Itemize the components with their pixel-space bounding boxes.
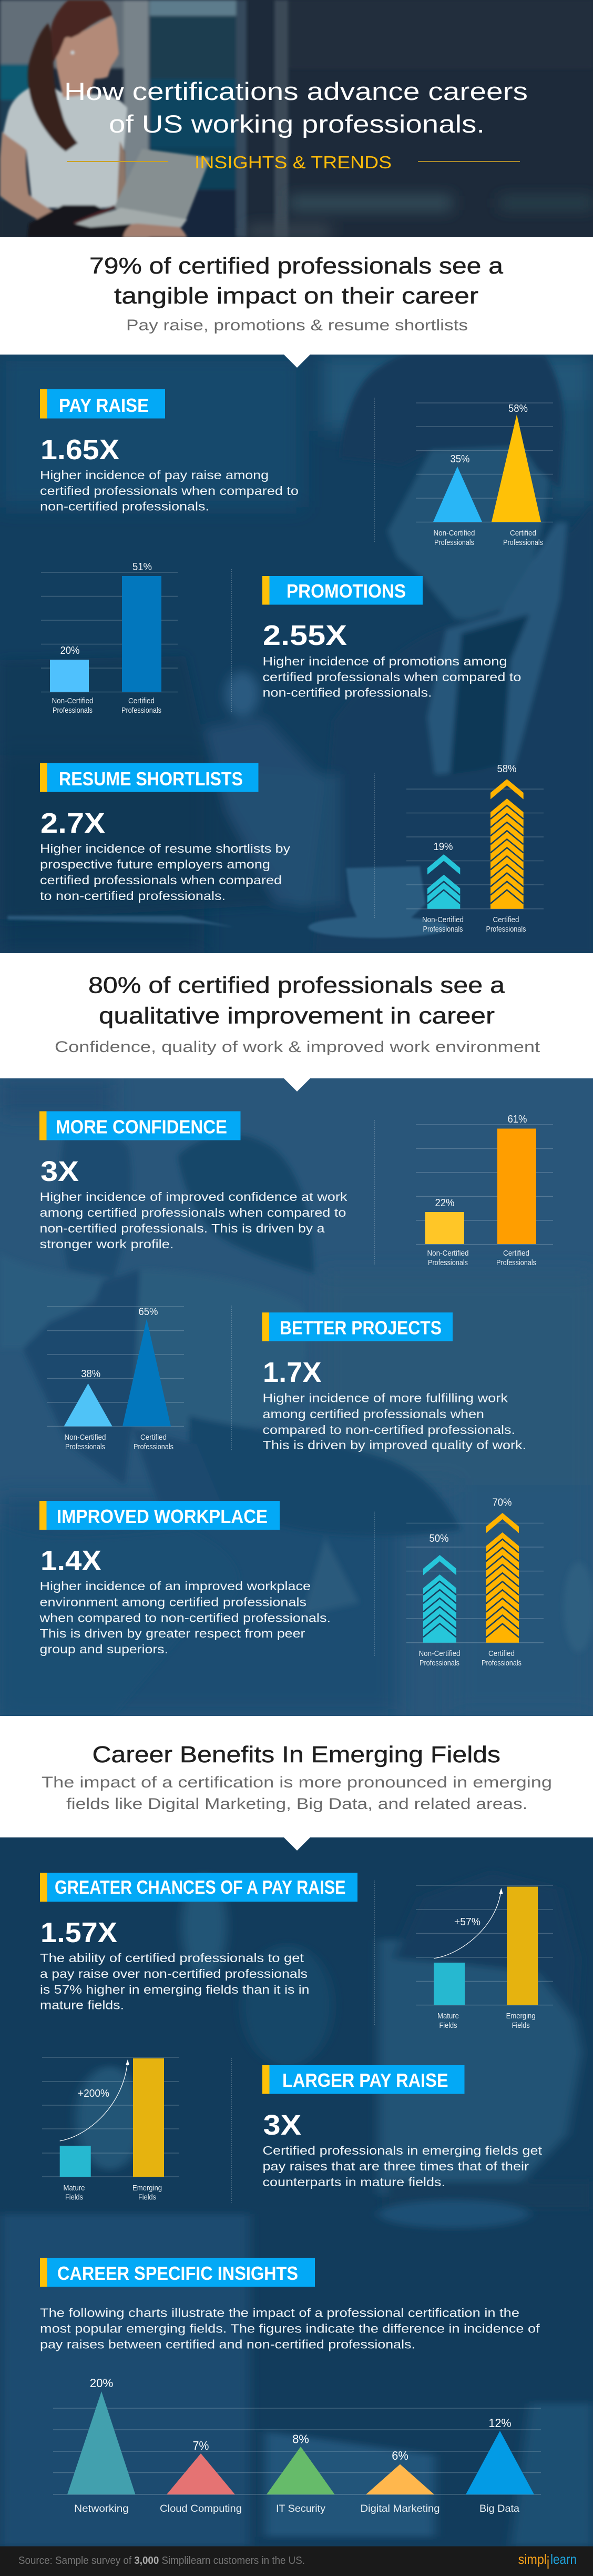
- it security: IT Security: [276, 2503, 326, 2514]
- triangle chart: 58%: [508, 403, 528, 415]
- subheading: Confidence, quality of work & improved work environment: [55, 1038, 540, 1056]
- triangle chart: [416, 403, 553, 547]
- description: to non-certified professionals.: [40, 889, 226, 903]
- description: among certified professionals when: [263, 1407, 484, 1421]
- figure: 3X: [40, 1156, 79, 1187]
- it security: 8%: [292, 2432, 309, 2446]
- description: non-certified professionals.: [263, 686, 432, 700]
- chevron chart: 19%: [433, 841, 453, 853]
- digital marketing: [361, 2449, 439, 2514]
- hero panel: [0, 0, 593, 237]
- hero photo: woman with laptop: [0, 0, 593, 237]
- chevron chart: [406, 763, 544, 934]
- description: is 57% higher in emerging fields than it is in: [40, 1983, 309, 1996]
- panel: 80% qualitative improvement header: [0, 953, 593, 1078]
- bar chart: Professionals: [53, 706, 93, 715]
- triangle chart: Certified: [510, 529, 536, 538]
- description: [39, 1579, 331, 1656]
- bar chart: [41, 561, 178, 715]
- photo background: section three, smiling man and laptop: [0, 1837, 593, 2547]
- triangle chart: 35%: [450, 453, 470, 465]
- tag: PROMOTIONS: [287, 580, 406, 602]
- tag: GREATER CHANCES OF A PAY RAISE: [55, 1876, 346, 1898]
- description: compared to non-certified professionals.: [263, 1423, 515, 1437]
- figure: 3X: [263, 2109, 301, 2141]
- triangle chart: Non-Certified: [433, 529, 475, 538]
- description: certified professionals when compared: [40, 873, 282, 887]
- subheading: fields like Digital Marketing, Big Data, and related areas.: [66, 1795, 528, 1813]
- description: [263, 654, 522, 700]
- description: This is driven by improved quality of work.: [263, 1438, 526, 1452]
- triangle chart: [47, 1306, 184, 1451]
- chevron chart: 50%: [429, 1533, 449, 1544]
- panel: 79% tangible impact header: [0, 237, 593, 355]
- description: Higher incidence of more fulfilling work: [263, 1391, 508, 1405]
- hero title: How certifications advance careers: [64, 77, 528, 105]
- tag: [40, 763, 259, 792]
- subheading: The impact of a certification is more pronounced in emerging: [42, 1774, 552, 1791]
- heading: 80% of certified professionals see a: [88, 972, 505, 998]
- triangle chart: Non-Certified: [64, 1433, 106, 1442]
- description: environment among certified professionals: [40, 1595, 306, 1609]
- notch arrow: [284, 1837, 310, 1851]
- tag: [39, 1111, 241, 1140]
- bar chart: Professionals: [496, 1259, 536, 1267]
- block: promotions: [41, 561, 522, 715]
- tag: PAY RAISE: [59, 395, 149, 416]
- description: [40, 2306, 540, 2351]
- tag: CAREER SPECIFIC INSIGHTS: [57, 2262, 298, 2284]
- description: Higher incidence of resume shortlists by: [40, 842, 291, 855]
- bar chart with growth arrow: [42, 2057, 179, 2202]
- bar chart with growth arrow: Emerging: [132, 2184, 162, 2193]
- description: pay raises between certified and non-certified professionals.: [40, 2338, 415, 2351]
- tag: IMPROVED WORKPLACE: [57, 1506, 268, 1527]
- chevron chart: Professionals: [423, 925, 463, 934]
- figure: 2.55X: [263, 620, 347, 651]
- description: group and superiors.: [40, 1642, 168, 1656]
- triangle chart: Certified: [140, 1433, 167, 1442]
- description: stronger work profile.: [40, 1237, 173, 1251]
- footer: [0, 2546, 593, 2576]
- chevron chart: Certified: [488, 1650, 515, 1658]
- cloud computing: [160, 2439, 242, 2514]
- networking: 20%: [90, 2376, 113, 2390]
- logo: simplilearn: i: [547, 2553, 549, 2572]
- chevron chart: Non-Certified: [418, 1650, 461, 1658]
- heading: 79% of certified professionals see a: [89, 253, 504, 279]
- chevron chart: 58%: [497, 763, 517, 775]
- figure: 1.4X: [40, 1545, 101, 1577]
- hero subtitle: insights and trends: INSIGHTS & TRENDS: [195, 153, 392, 172]
- heading: qualitative improvement in career: [99, 1003, 495, 1029]
- chevron chart: Professionals: [486, 925, 526, 934]
- logo: simplilearn: simpl: [518, 2551, 547, 2567]
- block: career specific insights: [40, 2258, 541, 2514]
- tag: MORE CONFIDENCE: [56, 1116, 227, 1137]
- triangle chart: 65%: [139, 1306, 158, 1318]
- heading: [89, 253, 504, 309]
- arrow: [60, 2059, 129, 2141]
- cloud computing: 7%: [192, 2439, 209, 2452]
- logo: simplilearn: [518, 2551, 577, 2572]
- tag: RESUME SHORTLISTS: [59, 768, 243, 790]
- block: resume shortlists: [40, 763, 544, 934]
- description: The ability of certified professionals to get: [40, 1951, 304, 1965]
- description: Higher incidence of pay raise among: [40, 468, 269, 482]
- it security: [267, 2432, 335, 2514]
- triangle chart: 38%: [81, 1368, 100, 1380]
- photo background: section one, man at laptop: [0, 350, 593, 953]
- certified chevron bar: [486, 1513, 519, 1643]
- chevron chart: Professionals: [420, 1659, 459, 1668]
- description: certified professionals when compared to: [40, 484, 299, 498]
- triangle chart by field: [53, 2376, 541, 2514]
- description: [263, 1391, 526, 1452]
- notch arrow: [284, 1078, 310, 1092]
- block: pay raise: [40, 389, 553, 547]
- description: certified professionals when compared to: [263, 670, 522, 684]
- description: [40, 1190, 347, 1251]
- bar chart with growth arrow: Fields: [512, 2022, 530, 2030]
- digital marketing: 6%: [392, 2449, 408, 2462]
- bar chart with growth arrow: Fields: [439, 2022, 457, 2030]
- notch arrow: [284, 355, 310, 368]
- figure: 2.7X: [40, 807, 105, 839]
- triangle chart: Professionals: [503, 539, 543, 547]
- description: mature fields.: [40, 1998, 124, 2012]
- bar chart with growth arrow: Emerging: [506, 2012, 536, 2021]
- triangle chart: Professionals: [134, 1443, 173, 1451]
- description: Certified professionals in emerging fields get: [263, 2144, 543, 2157]
- bar chart: 51%: [132, 561, 152, 573]
- source note: Source: Sample survey of 3,000 Simplilearn customers in the US.: [18, 2555, 305, 2567]
- networking: [67, 2376, 136, 2514]
- bar chart: [416, 1114, 553, 1267]
- non-certified chevron bar: [423, 1555, 456, 1643]
- photo background: section two, colleagues: [0, 1078, 593, 1716]
- cloud computing: Cloud Computing: [160, 2503, 242, 2514]
- logo: simplilearn: learn: [550, 2551, 577, 2567]
- tag: BETTER PROJECTS: [280, 1317, 442, 1339]
- bar chart: Professionals: [121, 706, 161, 715]
- chevron chart: Professionals: [482, 1659, 522, 1668]
- description: a pay raise over non-certified professionals: [40, 1967, 308, 1981]
- arrow: [434, 1888, 503, 1958]
- chevron chart: [406, 1497, 544, 1668]
- figure: 1.7X: [263, 1357, 322, 1388]
- hero title: [64, 77, 528, 138]
- tag: [262, 576, 423, 605]
- description: [40, 468, 299, 513]
- description: pay raises that are three times that of their: [263, 2159, 529, 2173]
- bar chart with growth arrow: Fields: [138, 2194, 156, 2202]
- description: The following charts illustrate the impact of a professional certification in the: [40, 2306, 519, 2320]
- chevron chart: Non-Certified: [422, 916, 464, 924]
- description: non-certified professionals. This is driven by a: [40, 1221, 325, 1235]
- chevron chart: 70%: [492, 1497, 512, 1509]
- bar chart with growth arrow: +57%: [454, 1916, 480, 1928]
- description: non-certified professionals.: [40, 500, 209, 513]
- tag: [39, 1501, 280, 1530]
- block: greater chances of a pay raise: [40, 1873, 553, 2030]
- big data: 12%: [489, 2416, 511, 2430]
- panel: career benefits in emerging fields header: [0, 1716, 593, 1837]
- subheading: Pay raise, promotions & resume shortlists: [126, 317, 468, 334]
- bar chart: 22%: [435, 1197, 455, 1209]
- tag: [40, 389, 165, 419]
- heading: tangible impact on their career: [114, 283, 478, 309]
- figure: 1.57X: [40, 1917, 117, 1948]
- bar chart: Certified: [128, 697, 155, 705]
- hero title: of US working professionals.: [109, 110, 485, 138]
- heading: [88, 972, 505, 1029]
- bar chart: 61%: [508, 1114, 527, 1125]
- description: Higher incidence of improved confidence at work: [40, 1190, 347, 1204]
- description: most popular emerging fields. The figures indicate the difference in incidence of: [40, 2322, 540, 2336]
- tag: [262, 1312, 453, 1341]
- tag: [40, 2258, 315, 2287]
- networking: Networking: [74, 2503, 129, 2514]
- subheading: [42, 1774, 552, 1813]
- tag: [40, 1873, 357, 1902]
- non-certified chevron bar: [427, 854, 460, 909]
- description: among certified professionals when compared to: [40, 1206, 346, 1219]
- description: prospective future employers among: [40, 857, 270, 871]
- bar chart with growth arrow: Mature: [63, 2184, 85, 2193]
- description: Higher incidence of an improved workplace: [40, 1579, 311, 1593]
- block: better projects: [47, 1306, 526, 1452]
- heading: Career Benefits In Emerging Fields: [93, 1742, 500, 1767]
- bar chart with growth arrow: Fields: [65, 2194, 83, 2202]
- bar chart: Professionals: [428, 1259, 468, 1267]
- figure: 1.65X: [40, 434, 119, 466]
- bar chart: Certified: [503, 1249, 529, 1258]
- triangle chart: Professionals: [65, 1443, 105, 1451]
- bar chart: 20%: [60, 645, 80, 656]
- block: improved workplace: [39, 1497, 544, 1668]
- bar chart with growth arrow: [416, 1885, 553, 2030]
- certified chevron bar: [490, 779, 524, 909]
- block: more confidence: [39, 1111, 553, 1267]
- bar chart with growth arrow: +200%: [78, 2088, 109, 2099]
- block: larger pay raise: [42, 2057, 543, 2203]
- chevron chart: Certified: [493, 916, 519, 924]
- digital marketing: Digital Marketing: [361, 2503, 439, 2514]
- triangle chart: Professionals: [434, 539, 474, 547]
- description: counterparts in mature fields.: [263, 2175, 445, 2189]
- tag: [262, 2065, 465, 2094]
- description: [40, 842, 291, 903]
- description: [40, 1951, 309, 2012]
- bar chart with growth arrow: Mature: [437, 2012, 459, 2021]
- big data: Big Data: [479, 2503, 519, 2514]
- big data: [466, 2416, 534, 2514]
- description: when compared to non-certified professionals.: [39, 1611, 331, 1624]
- description: This is driven by greater respect from peer: [40, 1627, 305, 1640]
- tag: LARGER PAY RAISE: [282, 2069, 448, 2091]
- description: [263, 2144, 543, 2189]
- bar chart: Non-Certified: [427, 1249, 469, 1258]
- description: Higher incidence of promotions among: [263, 654, 507, 668]
- bar chart: Non-Certified: [52, 697, 94, 705]
